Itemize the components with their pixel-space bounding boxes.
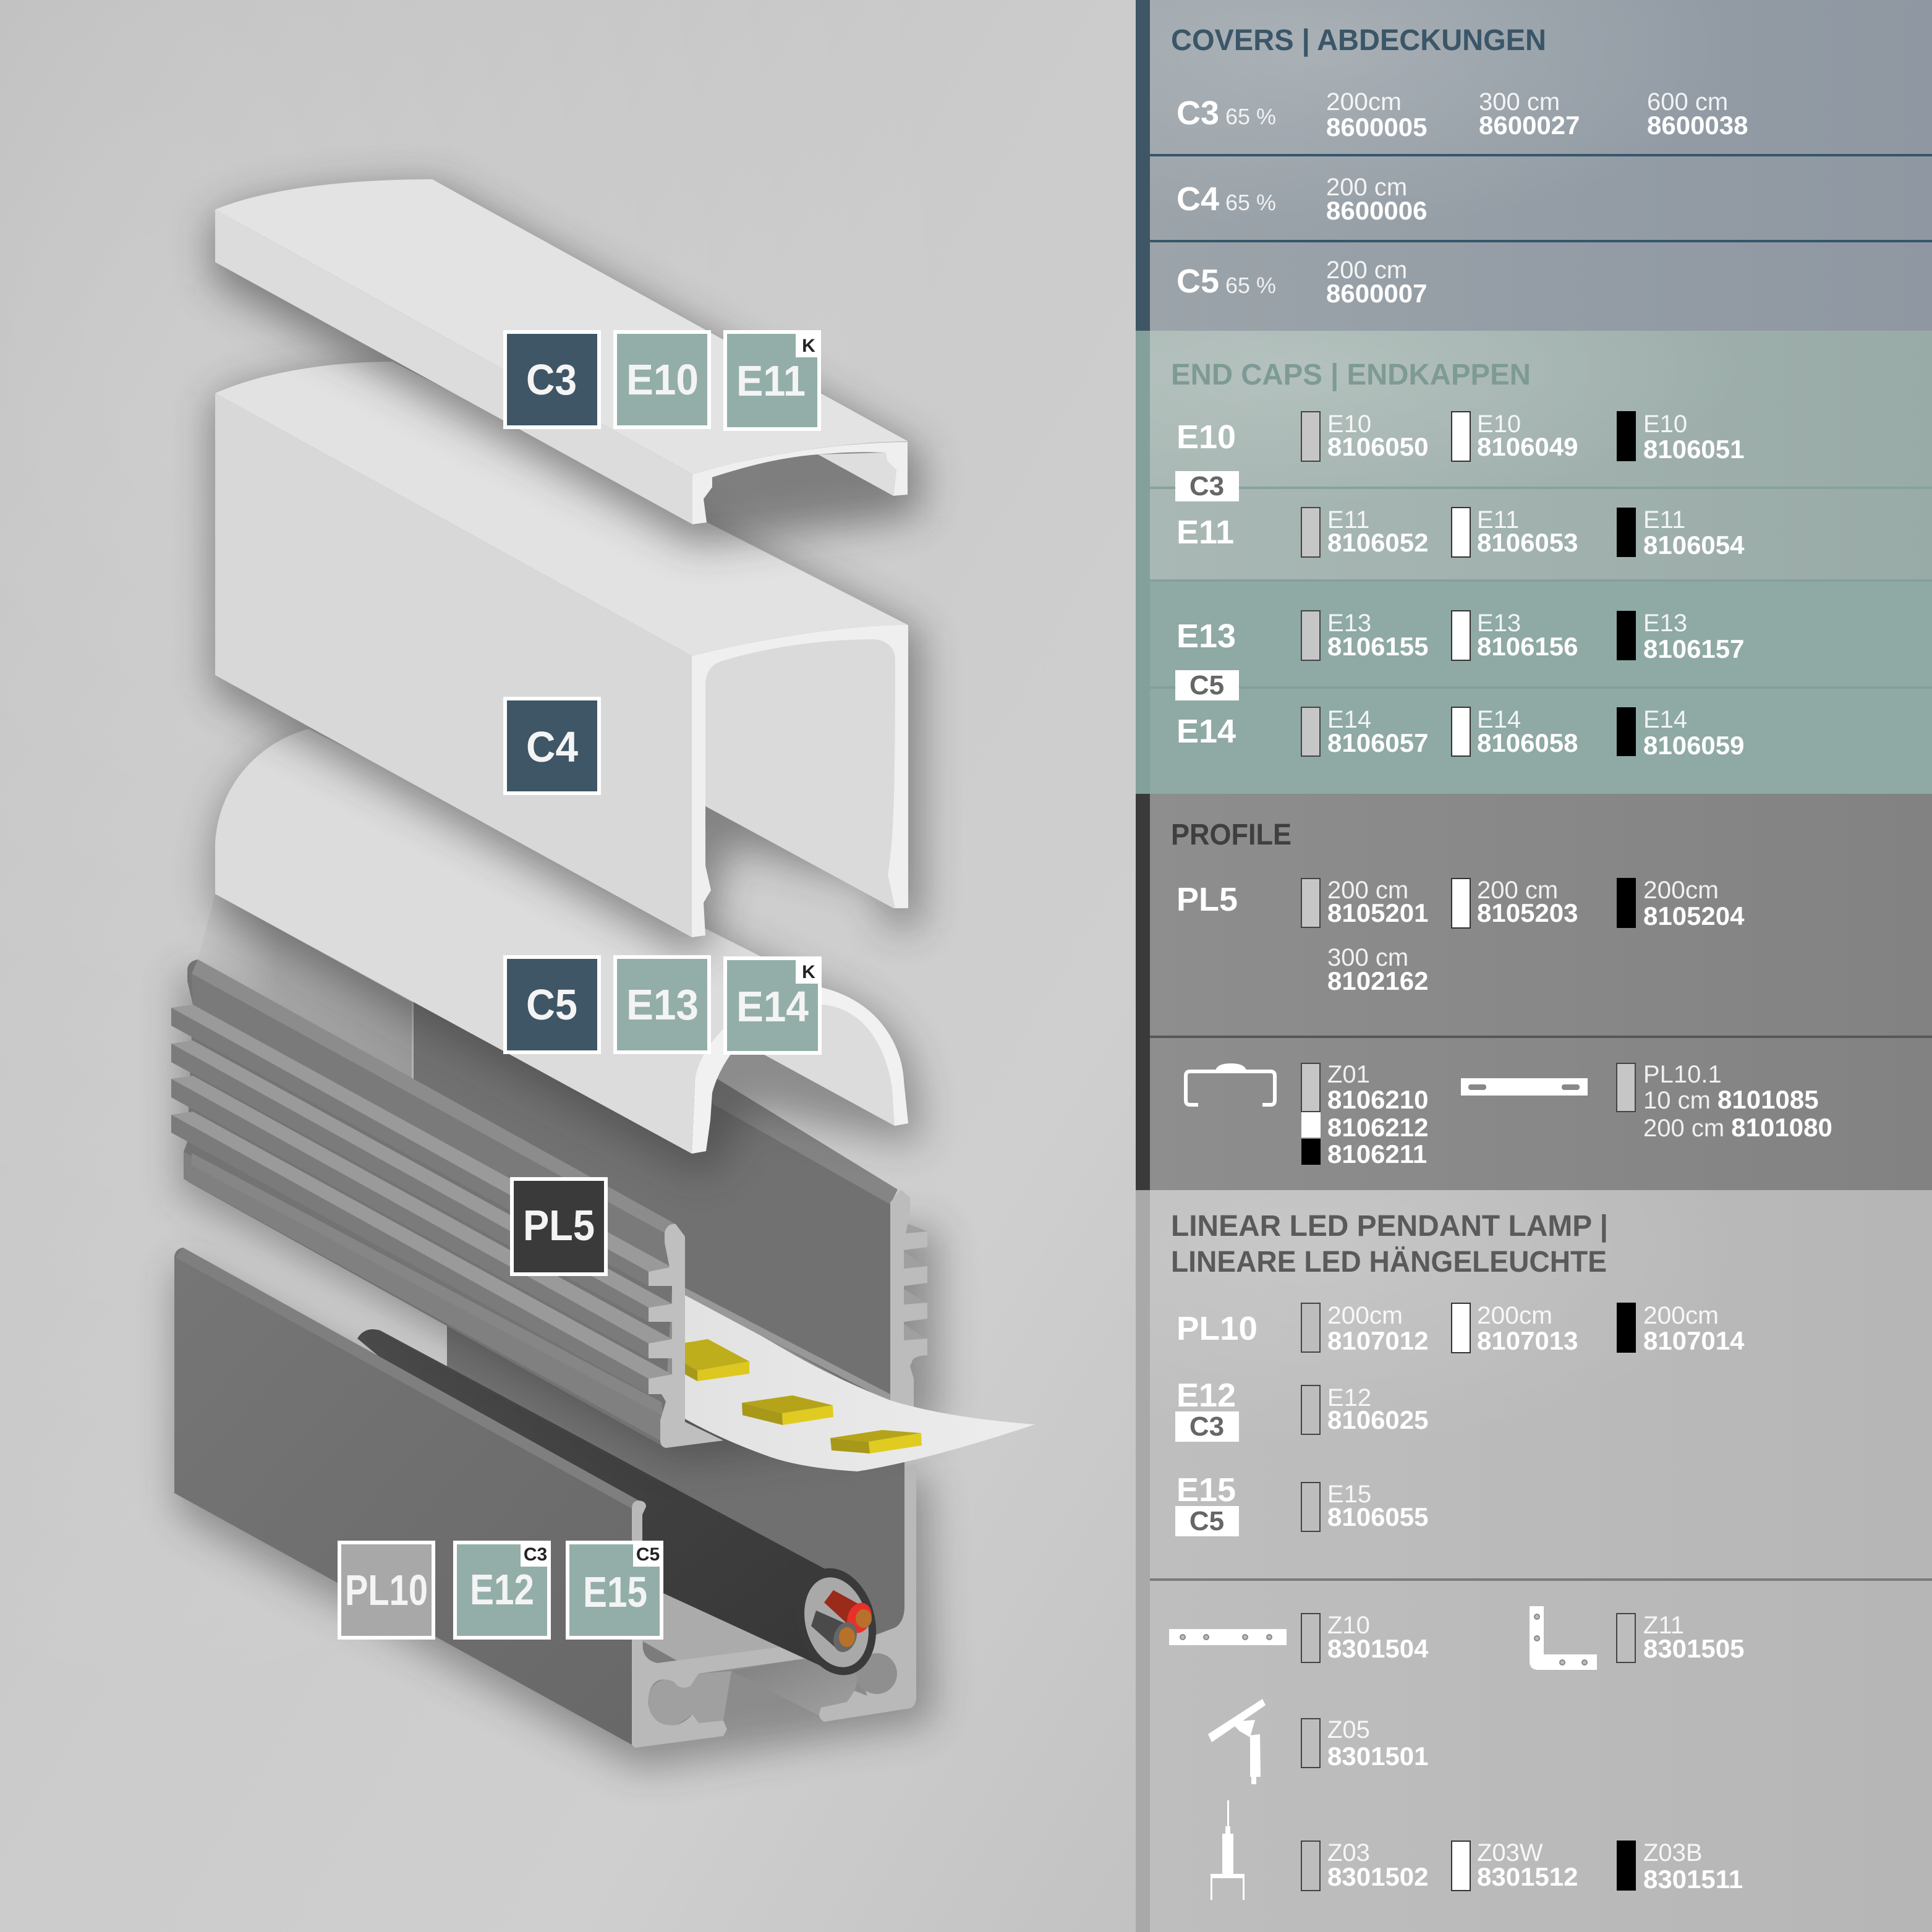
row: E10: E10 — [1177, 419, 1236, 456]
row: Z01 — [1301, 1061, 1429, 1168]
row: Z01: 8106212 — [1327, 1113, 1429, 1142]
shadow: PL5 — [187, 977, 931, 1456]
row: C4: 65 % — [1225, 190, 1276, 215]
row: PL5: 200 cm — [1477, 877, 1558, 904]
row: E14: E14 — [1477, 706, 1521, 733]
row: E15: 8106055 — [1327, 1502, 1429, 1531]
row: PL5: 8105204 — [1643, 901, 1745, 930]
heading: pendant lamp: LINEARE LED HÄNGELEUCHTE — [1171, 1246, 1607, 1279]
row: C3: 300 cm — [1479, 88, 1560, 116]
row: C3: 8600027 — [1479, 111, 1580, 140]
badge: E12 — [455, 1541, 551, 1638]
row: E11: E11 — [1327, 506, 1369, 534]
LED chip 2 — [742, 1395, 833, 1425]
row: C5: 65 % — [1225, 273, 1276, 298]
row: E13: 8106155 — [1327, 632, 1429, 661]
row: E13: E13 — [1327, 610, 1371, 637]
row: Z10: 8301504 — [1327, 1634, 1429, 1663]
row: PL10: 8107014 — [1643, 1326, 1745, 1355]
row: PL5: 8105203 — [1477, 898, 1578, 927]
row: C3: C3 — [1177, 95, 1219, 132]
PL10 channel — [731, 1659, 862, 1716]
dark wire — [811, 1611, 861, 1656]
row: Z10 — [1301, 1612, 1429, 1663]
row: C3: 8600038 — [1647, 111, 1748, 140]
LED strip — [685, 1295, 1035, 1471]
PL10 end face — [632, 1464, 916, 1748]
badge: C4: C4 — [526, 723, 578, 771]
cable — [357, 1329, 888, 1684]
badge: E15 — [568, 1541, 663, 1638]
row: E13: E13 — [1177, 618, 1236, 655]
row: E13: 8106156 — [1477, 632, 1578, 661]
shadow: C3 — [220, 194, 913, 538]
part: C4 cover — [215, 362, 908, 937]
row: PL5: PL5 — [1177, 881, 1238, 918]
badge: E15: E15 — [583, 1568, 647, 1616]
tag: C3: C3 — [1189, 471, 1224, 501]
badge: E15: C5 — [636, 1544, 660, 1565]
row: Z03: 8301511 — [1643, 1865, 1743, 1894]
badge: PL10 — [339, 1543, 433, 1638]
row: PL10.1: 10 cm 8101085 — [1643, 1085, 1819, 1114]
shadow: C4 — [220, 374, 913, 950]
row: Z03: Z03W — [1477, 1839, 1543, 1866]
icon: Z10 straight connector — [1169, 1629, 1287, 1645]
wall step above strip — [685, 1288, 890, 1402]
row: PL5: 200 cm — [1327, 877, 1408, 904]
row: PL5: 8102162 — [1327, 966, 1429, 995]
row: E14: E14 — [1327, 706, 1371, 733]
row: C3: 200cm — [1326, 88, 1402, 116]
row: E10: E10 — [1643, 411, 1687, 438]
row: E15: E15 — [1327, 1481, 1371, 1508]
row: E13: E13 — [1477, 610, 1521, 637]
PL5 right fins behind — [904, 1223, 927, 1340]
row: E14: 8106057 — [1327, 728, 1429, 757]
row: Z11: 8301505 — [1643, 1634, 1745, 1663]
row: Z01: 8106210 — [1327, 1085, 1429, 1114]
row: Z03: Z03 — [1327, 1839, 1370, 1866]
row: C4 — [1177, 174, 1428, 225]
heading: pendant lamp: LINEAR LED PENDANT LAMP | — [1171, 1210, 1608, 1243]
row: E12: C3 — [1189, 1411, 1224, 1442]
PL5 body — [184, 960, 676, 1448]
shadow: lower profile — [184, 1270, 926, 1761]
row: Z10: Z10 — [1327, 1612, 1370, 1639]
panel: covers — [1136, 0, 1932, 331]
row: E14 — [1177, 706, 1745, 760]
row: Z11: Z11 — [1643, 1612, 1684, 1639]
row: PL10.1: 200 cm 8101080 — [1643, 1113, 1832, 1142]
row: Z03 — [1301, 1839, 1743, 1894]
panel: end caps — [1136, 331, 1932, 794]
row: Z01: Z01 — [1327, 1061, 1370, 1088]
row: Z05: Z05 — [1327, 1716, 1370, 1743]
badge: C3: C3 — [526, 355, 577, 404]
row: PL5: 200cm — [1643, 877, 1719, 904]
badge: E14: E14 — [736, 982, 809, 1031]
row: E10: E10 — [1477, 411, 1521, 438]
badge: PL10: PL10 — [345, 1566, 428, 1614]
row: PL10.1 — [1617, 1061, 1832, 1142]
panel: pendant lamp — [1136, 1190, 1932, 1932]
LED chip 3 — [830, 1430, 922, 1453]
row: E13 — [1177, 610, 1745, 663]
row: PL10: 200cm — [1477, 1302, 1552, 1329]
row: E12: E12 — [1177, 1377, 1236, 1414]
row: E15: C5 — [1189, 1506, 1224, 1536]
badge: E14 — [725, 956, 822, 1053]
badge: E12: C3 — [524, 1544, 547, 1565]
row: PL10.1: PL10.1 — [1643, 1061, 1722, 1088]
icon: mounting clip Z01 — [1186, 1063, 1275, 1105]
row: E14: 8106059 — [1643, 731, 1745, 760]
badge: E12: E12 — [470, 1565, 534, 1614]
badge: PL5 — [512, 1179, 606, 1274]
PL10 side wall — [174, 1248, 639, 1745]
row: Z03: 8301502 — [1327, 1862, 1429, 1891]
badge: E10: E10 — [626, 355, 699, 404]
row: PL10: 8107013 — [1477, 1326, 1578, 1355]
badge: E13: E13 — [626, 981, 699, 1029]
red wire — [824, 1590, 875, 1636]
PL5 right end face — [890, 1189, 927, 1416]
row: E12 — [1175, 1377, 1429, 1442]
row: C4: 200 cm — [1326, 174, 1407, 201]
row: Z03: Z03B — [1643, 1839, 1703, 1866]
heading: covers: COVERS | ABDECKUNGEN — [1171, 24, 1546, 57]
badge: E10 — [615, 332, 709, 427]
row: E11: E11 — [1643, 506, 1685, 534]
row: Z05 — [1301, 1716, 1429, 1771]
badge: C3 — [505, 332, 599, 427]
row: E10: E10 — [1327, 411, 1371, 438]
row: E10 — [1177, 411, 1745, 464]
row: PL5 — [1177, 877, 1745, 995]
row: E15: E15 — [1177, 1471, 1236, 1509]
row: E14: 8106058 — [1477, 728, 1578, 757]
badge: E14: K — [802, 962, 815, 982]
part: C3 cover — [215, 179, 908, 524]
icon: connector plate — [1461, 1078, 1588, 1096]
heading: pendant lamp — [1171, 1210, 1608, 1279]
badge: E13 — [615, 957, 709, 1052]
row: E14: E14 — [1643, 706, 1687, 733]
row: Z03: 8301512 — [1477, 1862, 1578, 1891]
row: C4: C4 — [1177, 181, 1219, 218]
row: E10: 8106050 — [1327, 432, 1429, 461]
badge: E11: K — [802, 336, 815, 356]
row: E13: 8106157 — [1643, 634, 1745, 663]
row: PL10: 200cm — [1327, 1302, 1403, 1329]
tag: C5 — [1175, 670, 1239, 700]
row: E14: E14 — [1177, 713, 1236, 750]
part: PL10 housing — [174, 1248, 916, 1748]
row: E11: 8106054 — [1643, 530, 1745, 560]
row: C5: C5 — [1177, 263, 1219, 300]
row: C4: 8600006 — [1326, 196, 1428, 225]
part: PL5 profile — [171, 894, 1035, 1471]
row: E13: E13 — [1643, 610, 1687, 637]
PL5 left end face — [649, 1224, 723, 1448]
icon: Z11 corner connector — [1530, 1606, 1597, 1670]
row: E12: E12 — [1327, 1384, 1371, 1411]
row: PL10: 8107012 — [1327, 1326, 1429, 1355]
panel: profile — [1136, 794, 1932, 1190]
row: C3 — [1177, 88, 1748, 142]
PL10 left leg — [632, 1500, 646, 1663]
badge: C5 — [505, 957, 599, 1052]
row: E10: 8106049 — [1477, 432, 1578, 461]
background — [0, 0, 1138, 1932]
row: Z01: 8106211 — [1327, 1139, 1427, 1168]
row: C5: 8600007 — [1326, 279, 1428, 308]
LED chip 1 — [685, 1339, 749, 1381]
row: Z11 — [1617, 1612, 1745, 1663]
badge: E11 — [725, 330, 821, 429]
shadow: C5 — [220, 741, 913, 1166]
row: E15 — [1175, 1471, 1429, 1536]
row: PL5: 300 cm — [1327, 944, 1408, 971]
row: E10: 8106051 — [1643, 435, 1745, 464]
tag: C3 — [1175, 471, 1239, 501]
icon: Z05 angled mount — [1208, 1699, 1266, 1784]
exploded profile illustration — [171, 179, 1035, 1761]
PL5 cooling fins — [171, 1005, 672, 1440]
badge: PL5: PL5 — [523, 1201, 595, 1249]
badge: E11: E11 — [736, 357, 806, 405]
row: PL5: 8105201 — [1327, 898, 1429, 927]
row: E11: E11 — [1477, 506, 1519, 534]
row: E12: 8106025 — [1327, 1405, 1429, 1434]
heading: end caps: END CAPS | ENDKAPPEN — [1171, 359, 1531, 391]
row: PL10: PL10 — [1177, 1310, 1258, 1347]
badge: C5: C5 — [526, 981, 577, 1029]
row: E11: 8106052 — [1327, 528, 1429, 557]
heading: profile: PROFILE — [1171, 819, 1292, 851]
row: Z05: 8301501 — [1327, 1742, 1429, 1771]
row: C5 — [1177, 257, 1428, 308]
row: C3: 8600005 — [1326, 113, 1428, 142]
row: PL10: 200cm — [1643, 1302, 1719, 1329]
row: E11 — [1177, 506, 1745, 560]
row: E11: 8106053 — [1477, 528, 1578, 557]
badge: C4 — [505, 699, 599, 793]
tag: C5: C5 — [1189, 670, 1224, 700]
row: E11: E11 — [1177, 514, 1234, 551]
row: C5: 200 cm — [1326, 257, 1407, 284]
part: C5 cover — [215, 729, 908, 1154]
row: C3: 65 % — [1225, 104, 1276, 129]
PL10 left slot — [648, 1671, 731, 1726]
icon: Z03 suspension — [1211, 1800, 1245, 1900]
row: C3: 600 cm — [1647, 88, 1728, 116]
row: PL10 — [1177, 1302, 1745, 1355]
